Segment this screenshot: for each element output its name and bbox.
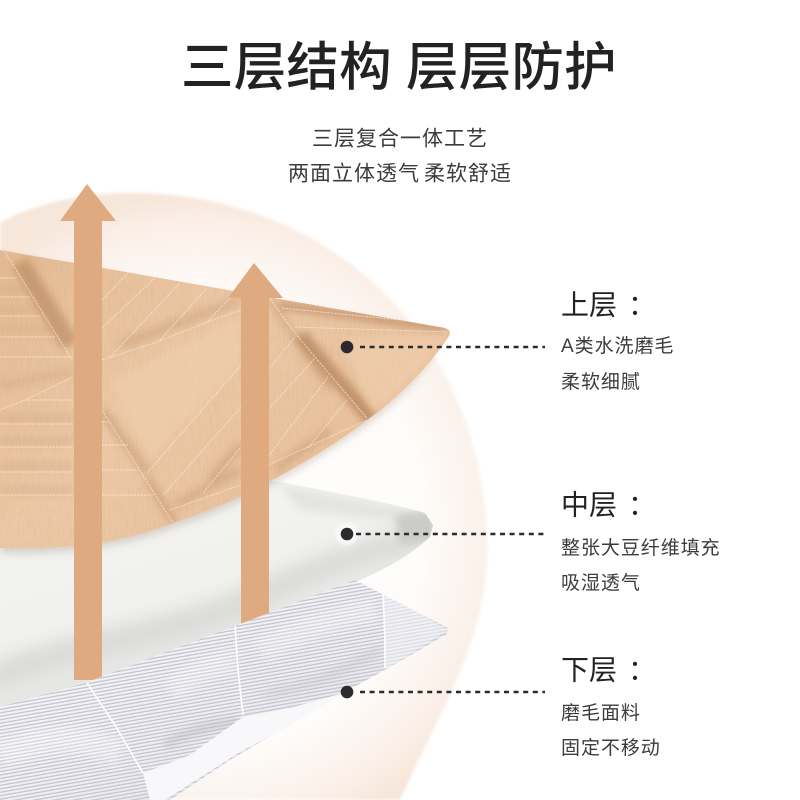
subtitle: 柔软舒适 <box>424 162 512 186</box>
text: lower layer: 固定不移动 <box>561 737 661 759</box>
quilting stitches <box>0 252 447 523</box>
text: lower layer <box>561 648 661 759</box>
text: upper layer: 上层 <box>561 290 617 320</box>
text: upper layer: ： <box>628 284 656 324</box>
subtitle: 三层复合一体工艺 <box>312 128 488 150</box>
text: middle layer <box>561 484 721 594</box>
text: upper layer: A类水洗磨毛 <box>561 335 674 357</box>
text: upper layer: 柔软细腻 <box>561 371 641 393</box>
text: middle layer: 吸湿透气 <box>561 572 641 594</box>
subtitle <box>288 128 512 186</box>
callout: middle layer <box>341 528 545 540</box>
text: middle layer: 中层 <box>561 490 617 520</box>
arrow: left upward <box>60 184 116 680</box>
arrow: right upward <box>228 263 283 625</box>
text: middle layer: 整张大豆纤维填充 <box>561 537 721 559</box>
text: lower layer: 磨毛面料 <box>561 702 641 724</box>
top layer: quilted tan fabric <box>0 240 460 560</box>
text: middle layer: ： <box>628 484 656 524</box>
background disc <box>0 193 487 800</box>
fabric folds and highlights <box>0 610 380 755</box>
callout: upper layer <box>341 341 545 353</box>
callout: lower layer <box>341 686 545 698</box>
text: lower layer: ： <box>628 648 656 688</box>
title: 层层防护 <box>406 38 617 97</box>
title: 三层结构 <box>181 38 392 97</box>
middle layer: soy fibre filling <box>0 480 435 720</box>
bottom layer: brushed white fabric <box>0 580 448 800</box>
subtitle: 两面立体透气 <box>288 162 420 186</box>
fabric grain <box>0 240 460 560</box>
fabric shading <box>0 262 445 523</box>
text: lower layer: 下层 <box>561 654 617 686</box>
text: upper layer <box>561 284 674 393</box>
